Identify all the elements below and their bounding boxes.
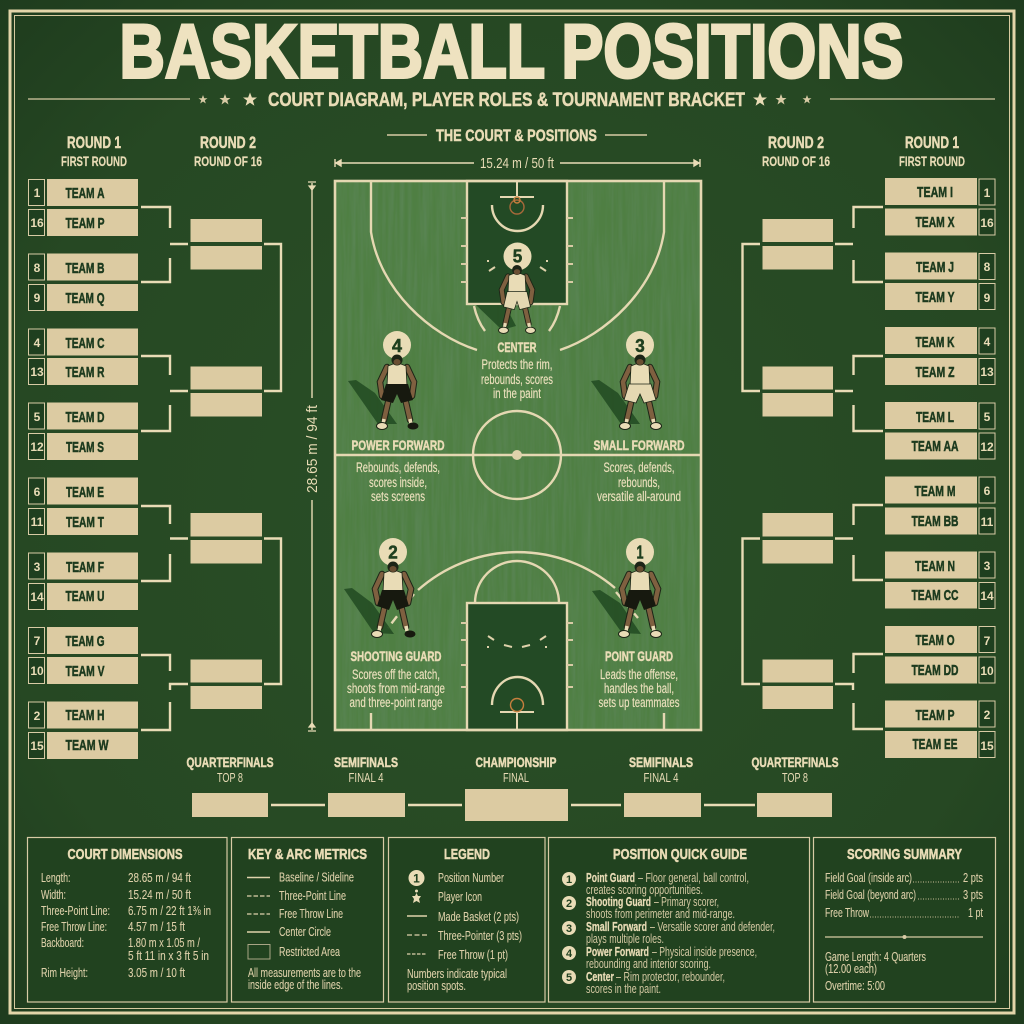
panel: scoring summary: Game Length: 4 Quarters — [825, 949, 926, 964]
panel: scoring summary — [814, 838, 996, 1002]
team E: TEAM E — [66, 484, 104, 501]
connectors left — [141, 207, 281, 730]
power forward label: POWER FORWARD — [352, 437, 444, 453]
finals bracket row — [186, 755, 838, 821]
court lines — [335, 181, 701, 730]
quarterfinals left — [186, 755, 274, 817]
quarterfinals left: QUARTERFINALS — [186, 755, 274, 770]
team Q: TEAM Q — [66, 290, 105, 307]
guide: small forward: plays multiple roles. — [586, 932, 664, 946]
panel: scoring summary: 1 pt — [968, 905, 983, 920]
guide: small forward: – Versatile scorer and defender, — [650, 920, 775, 934]
guide: center — [562, 970, 725, 996]
subtitle with stars: COURT DIAGRAM, PLAYER ROLES & TOURNAMENT BRACKET — [268, 90, 745, 111]
team D: 5 — [34, 410, 41, 424]
guide: point guard: 1 — [566, 874, 572, 886]
team K: 4 — [984, 335, 991, 349]
panel: scoring summary: Field Goal (beyond arc) — [825, 887, 916, 902]
team Y — [885, 283, 995, 310]
panel: legend: Position Number — [438, 870, 504, 885]
team U — [28, 583, 138, 610]
team L: 5 — [984, 410, 991, 424]
team C — [28, 328, 138, 356]
round headers left: ROUND OF 16 — [194, 153, 262, 169]
guide: power forward: Power Forward — [586, 945, 649, 959]
team T: TEAM T — [66, 514, 104, 531]
team A: 1 — [34, 186, 41, 200]
team CC: 14 — [980, 589, 994, 603]
panel: position quick guide: POSITION QUICK GUIDE — [613, 847, 747, 863]
finals connectors — [271, 804, 755, 806]
length dimension — [305, 182, 321, 731]
team I — [885, 178, 995, 205]
team W: TEAM W — [66, 737, 109, 754]
panel: scoring summary: 3 pts — [963, 887, 983, 902]
team V — [28, 657, 138, 684]
team M: TEAM M — [914, 483, 956, 500]
team S — [28, 433, 138, 460]
center label: CENTER — [498, 339, 536, 355]
team G: 7 — [34, 634, 41, 648]
guide: power forward: 4 — [566, 948, 573, 960]
team A: TEAM A — [66, 185, 105, 202]
court floor — [335, 181, 701, 730]
semifinals left: FINAL 4 — [348, 771, 384, 785]
team G: TEAM G — [66, 633, 104, 650]
team C: 4 — [34, 336, 41, 350]
team P right: 2 — [984, 708, 991, 722]
team S: 12 — [30, 440, 44, 454]
semifinals left: SEMIFINALS — [334, 755, 398, 770]
player 3 small forward: 3 — [635, 336, 645, 356]
small forward label — [594, 437, 684, 504]
team AA: 12 — [980, 440, 994, 454]
team X: 16 — [980, 216, 994, 230]
shooting guard label — [347, 648, 445, 710]
right bracket — [742, 134, 995, 758]
team F — [28, 552, 138, 580]
panel: court dimensions: Backboard: — [41, 935, 84, 950]
team J — [885, 252, 995, 280]
team EE: TEAM EE — [912, 736, 958, 753]
panel: key and arc metrics: Restricted Area — [279, 944, 341, 959]
shooting guard label: SHOOTING GUARD — [350, 648, 442, 664]
round headers left: ROUND 2 — [200, 134, 256, 152]
team AA — [885, 432, 995, 460]
center label: rebounds, scores — [481, 372, 553, 387]
team W — [28, 732, 138, 759]
panel: key and arc metrics: KEY & ARC METRICS — [248, 847, 367, 863]
player 3 small forward — [591, 331, 662, 430]
panel: position quick guide — [548, 838, 810, 1002]
team S: TEAM S — [66, 439, 104, 456]
team K: TEAM K — [916, 334, 955, 351]
guide: center: scores in the paint. — [586, 982, 661, 996]
panel: court dimensions: 3.05 m / 10 ft — [128, 965, 185, 980]
team AA: TEAM AA — [912, 438, 959, 455]
team P: 16 — [30, 216, 44, 230]
team J: 8 — [984, 260, 991, 274]
team H: 2 — [34, 709, 41, 723]
quarterfinals right — [752, 755, 838, 817]
panel: court dimensions: 5 ft 11 in x 3 ft 5 in — [128, 948, 209, 963]
panel: scoring summary: Field Goal (inside arc) — [825, 870, 912, 885]
team C: TEAM C — [66, 335, 105, 352]
team V: 10 — [30, 664, 44, 678]
team D: TEAM D — [66, 409, 105, 426]
round headers left — [61, 134, 262, 169]
semifinals right — [624, 755, 701, 817]
team V: TEAM V — [66, 663, 104, 680]
panel: scoring summary: SCORING SUMMARY — [847, 847, 962, 863]
panel: key and arc metrics: All measurements are to the — [248, 965, 361, 980]
length dimension: 28.65 m / 94 ft — [305, 405, 321, 493]
team H: TEAM H — [66, 707, 104, 724]
round headers right: ROUND OF 16 — [762, 153, 830, 169]
panel: court dimensions: Rim Height: — [41, 965, 88, 980]
panel: key and arc metrics: Baseline / Sideline — [279, 870, 354, 884]
player 2 shooting guard: 2 — [388, 542, 398, 562]
round headers right: ROUND 1 — [905, 134, 959, 152]
center label: Protects the rim, — [482, 357, 552, 372]
panel: scoring summary: Free Throw — [825, 905, 869, 920]
team T — [28, 508, 138, 535]
team U: TEAM U — [66, 588, 104, 605]
team G — [28, 627, 138, 654]
team E — [28, 478, 138, 504]
center label — [481, 339, 553, 401]
quarterfinals left: TOP 8 — [217, 771, 243, 785]
guide: point guard: creates scoring opportunities. — [586, 883, 703, 897]
team Q: 9 — [34, 291, 41, 305]
panel: key and arc metrics: Center Circle — [279, 924, 331, 939]
player 5 center — [476, 242, 535, 333]
small forward label: Scores, defends, — [604, 460, 674, 475]
connectors right — [742, 207, 883, 729]
semifinals right: SEMIFINALS — [629, 755, 693, 770]
team O: TEAM O — [916, 632, 955, 649]
player 1 point guard — [592, 538, 662, 638]
team J: TEAM J — [916, 259, 954, 276]
team B: 8 — [34, 261, 41, 275]
panel: legend: Made Basket (2 pts) — [438, 909, 519, 924]
panel: court dimensions: Length: — [41, 870, 70, 885]
team X — [885, 208, 995, 236]
team P — [28, 209, 138, 236]
team R — [28, 358, 138, 385]
team P right: TEAM P — [916, 707, 954, 724]
team M — [885, 476, 995, 504]
team T: 11 — [31, 515, 44, 529]
guide: point guard: – Floor general, ball control, — [638, 871, 749, 885]
team P: TEAM P — [66, 215, 104, 232]
left bracket — [28, 134, 281, 759]
team Y: 9 — [984, 291, 991, 305]
shooting guard label: and three-point range — [350, 695, 442, 710]
team W: 15 — [30, 739, 44, 753]
player 1 point guard: 1 — [636, 542, 644, 562]
round 2 boxes left — [190, 219, 262, 709]
point guard label: handles the ball, — [604, 681, 674, 696]
team Z — [885, 358, 995, 385]
basketball court — [335, 181, 701, 730]
power forward label — [352, 437, 444, 504]
power forward label: scores inside, — [369, 475, 427, 490]
player 4 power forward: 4 — [392, 336, 402, 356]
team P right — [885, 700, 995, 728]
panel: legend: Numbers indicate typical — [407, 966, 507, 981]
small forward label: rebounds, — [618, 475, 660, 490]
width dimension: 15.24 m / 50 ft — [480, 156, 554, 172]
point guard label: Leads the offense, — [600, 667, 678, 682]
guide: point guard — [562, 871, 749, 897]
icon: player — [412, 890, 421, 903]
panel: court dimensions — [28, 838, 227, 1002]
point guard label: sets up teammates — [598, 695, 680, 710]
panel: legend: LEGEND — [444, 847, 490, 863]
guide: power forward: – Physical inside presence, — [652, 945, 757, 959]
icon: position number: 1 — [413, 872, 420, 886]
team BB: TEAM BB — [912, 513, 959, 530]
team D — [28, 402, 138, 430]
round headers right: FIRST ROUND — [899, 153, 965, 169]
guide: small forward — [562, 920, 775, 946]
bottom key — [467, 603, 567, 730]
team E: 6 — [34, 485, 41, 499]
team BB — [885, 508, 995, 534]
hoop bottom — [500, 698, 534, 730]
team O — [885, 626, 995, 653]
panel: key and arc metrics: Free Throw Line — [279, 906, 343, 921]
guide: small forward: Small Forward — [586, 920, 647, 934]
team DD: TEAM DD — [912, 662, 959, 679]
quarterfinals right: TOP 8 — [782, 771, 808, 785]
team I: TEAM I — [917, 184, 953, 201]
small forward label: versatile all-around — [597, 489, 681, 504]
team F: 3 — [34, 560, 41, 574]
panel: court dimensions: Three-Point Line: — [41, 903, 110, 918]
team R: 13 — [30, 365, 44, 379]
point guard label — [598, 648, 680, 710]
championship: FINAL — [503, 771, 529, 785]
team L: TEAM L — [916, 409, 954, 426]
panel: scoring summary: Overtime: 5:00 — [825, 978, 885, 993]
panel: legend — [388, 838, 545, 1002]
team F: TEAM F — [66, 559, 104, 576]
guide: power forward: rebounding and interior scoring. — [586, 957, 711, 971]
round headers right: ROUND 2 — [768, 134, 824, 152]
team B: TEAM B — [66, 260, 105, 277]
guide: shooting guard: shoots from perimeter and mid-range. — [586, 907, 735, 921]
panel: legend: Player Icon — [438, 889, 482, 904]
panel: legend: position spots. — [407, 978, 466, 993]
top key — [467, 181, 567, 304]
panel: court dimensions: 1.80 m x 1.05 m / — [128, 935, 200, 950]
team Z: 13 — [980, 365, 994, 379]
team I: 1 — [984, 186, 991, 200]
team EE — [885, 731, 995, 758]
championship — [465, 755, 568, 821]
guide: power forward — [562, 945, 757, 971]
guide: point guard: Point Guard — [586, 871, 635, 885]
semifinals right: FINAL 4 — [644, 771, 679, 785]
panel: court dimensions: 15.24 m / 50 ft — [128, 887, 191, 902]
guide: center: 5 — [566, 972, 572, 984]
team Q — [28, 284, 138, 311]
icon: position number — [408, 870, 424, 886]
team DD — [885, 656, 995, 684]
team M: 6 — [984, 484, 991, 498]
team CC: TEAM CC — [912, 587, 959, 604]
shooting guard label: Scores off the catch, — [352, 667, 440, 682]
player 4 power forward — [348, 331, 418, 430]
team R: TEAM R — [66, 364, 105, 381]
team H — [28, 702, 138, 728]
quarterfinals right: QUARTERFINALS — [752, 755, 838, 770]
round headers left: FIRST ROUND — [61, 153, 127, 169]
court boundary — [335, 181, 701, 730]
guide: shooting guard: 2 — [566, 898, 572, 910]
power forward label: Rebounds, defends, — [356, 460, 440, 475]
team N — [885, 552, 995, 578]
team N: 3 — [984, 559, 991, 573]
team CC — [885, 582, 995, 608]
team DD: 10 — [980, 664, 994, 678]
panel: key and arc metrics: Three-Point Line — [279, 888, 346, 903]
guide: shooting guard: Shooting Guard — [586, 895, 651, 909]
round 2 boxes right — [762, 219, 833, 709]
panel: court dimensions: COURT DIMENSIONS — [68, 847, 183, 863]
subtitle with stars — [28, 90, 995, 111]
panel: court dimensions: 4.57 m / 15 ft — [128, 919, 185, 934]
small forward label: SMALL FORWARD — [594, 437, 684, 453]
panel: key and arc metrics: inside edge of the lines. — [248, 977, 343, 992]
panel: key and arc metrics — [232, 838, 384, 1002]
team A — [28, 179, 138, 206]
championship: CHAMPIONSHIP — [476, 755, 556, 770]
guide: center: Center — [586, 970, 614, 984]
guide: shooting guard — [562, 895, 735, 921]
team Y: TEAM Y — [916, 289, 954, 306]
panel: legend: Three-Pointer (3 pts) — [438, 928, 522, 943]
round headers right — [762, 134, 965, 169]
point guard label: POINT GUARD — [605, 648, 673, 664]
guide: center: – Rim protector, rebounder, — [616, 970, 725, 984]
guide: shooting guard: – Primary scorer, — [654, 895, 719, 909]
shooting guard label: shoots from mid-range — [347, 681, 445, 696]
team EE: 15 — [980, 739, 994, 753]
team Z: TEAM Z — [916, 364, 954, 381]
guide: small forward: 3 — [566, 923, 572, 935]
team N: TEAM N — [915, 558, 955, 575]
panel: court dimensions: Width: — [41, 887, 66, 902]
team B — [28, 254, 138, 280]
panel: scoring summary: (12.00 each) — [825, 961, 877, 976]
team BB: 11 — [981, 515, 994, 529]
semifinals left — [328, 755, 405, 817]
panel: legend: Free Throw (1 pt) — [438, 947, 508, 962]
panel: court dimensions: 6.75 m / 22 ft 1⅜ in — [128, 903, 211, 918]
round headers left: ROUND 1 — [67, 134, 121, 152]
power forward label: sets screens — [371, 489, 425, 504]
player 5 center: 5 — [513, 246, 522, 266]
hoop top — [500, 181, 534, 214]
panel: court dimensions: 28.65 m / 94 ft — [128, 870, 191, 885]
team O: 7 — [984, 634, 991, 648]
team K — [885, 327, 995, 354]
team L — [885, 402, 995, 429]
player 2 shooting guard — [344, 538, 416, 638]
width dimension — [335, 156, 700, 172]
team U: 14 — [30, 590, 44, 604]
panel: court dimensions: Free Throw Line: — [41, 919, 107, 934]
team X: TEAM X — [916, 214, 954, 231]
court section heading: THE COURT & POSITIONS — [436, 126, 597, 145]
center label: in the paint — [493, 386, 541, 401]
panel: scoring summary: 2 pts — [963, 870, 983, 885]
